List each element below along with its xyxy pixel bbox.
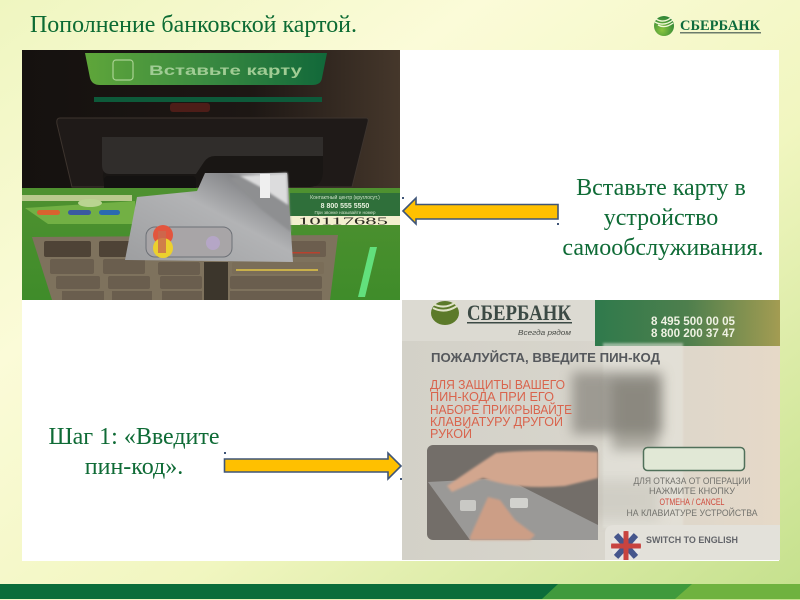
instruction text: step 1: Шаг 1: «Введите (48, 424, 220, 450)
cancel instructions (626, 476, 758, 518)
cancel instructions: НА КЛАВИАТУРЕ УСТРОЙСТВА (626, 507, 758, 518)
instruction text: insert card (562, 175, 764, 261)
red warning: НАБОРЕ ПРИКРЫВАЙТЕ (430, 402, 572, 417)
screen logo: СБЕРБАНК (467, 300, 571, 325)
reflection on the glass (566, 342, 684, 525)
bank card (125, 173, 293, 262)
PIN input box (644, 448, 744, 470)
screen header (402, 300, 780, 346)
phone numbers: 8 495 500 00 05 (651, 316, 736, 328)
screen logo (431, 300, 572, 337)
green sign: insert card (85, 53, 327, 85)
green ATM body: При звонке называйте номер (314, 209, 376, 215)
arrow: pointing right to PIN screen (224, 452, 402, 480)
red warning: ПИН-КОДА ПРИ ЕГО (430, 390, 554, 404)
red warning (430, 378, 572, 441)
instruction text: step 1: пин-код». (85, 454, 183, 480)
card reader bezel (57, 118, 368, 200)
cancel instructions: НАЖМИТЕ КНОПКУ (649, 486, 735, 496)
screen heading: ПОЖАЛУЙСТА, ВВЕДИТЕ ПИН-КОД (431, 350, 661, 365)
title: Пополнение банковской картой. (30, 12, 357, 38)
arrow: pointing left to card photo (402, 197, 559, 225)
logo: Sberbank (654, 16, 761, 36)
switch to English button (605, 525, 780, 561)
instruction text: insert card: устройство (604, 205, 718, 231)
cancel instructions: ДЛЯ ОТКАЗА ОТ ОПЕРАЦИИ (634, 476, 750, 486)
green ATM body: 10117685 (298, 216, 389, 228)
photo: card inserted into ATM (22, 50, 400, 300)
switch to English button: SWITCH TO ENGLISH (646, 535, 738, 545)
red warning: КЛАВИАТУРУ ДРУГОЙ (430, 414, 563, 429)
instruction text: step 1 (48, 424, 220, 480)
instruction text: insert card: самообслуживания. (562, 235, 764, 261)
footer band (0, 584, 800, 599)
instruction text: insert card: Вставьте карту в (576, 175, 746, 201)
green sign: insert card: Вставьте карту (149, 63, 303, 78)
keypad (32, 235, 338, 300)
logo: Sberbank: СБЕРБАНК (680, 18, 760, 34)
screen logo: Всегда рядом (518, 328, 571, 337)
green ATM body: 8 800 555 5550 (321, 203, 369, 210)
red warning: РУКОЙ (430, 426, 472, 441)
cancel instructions: ОТМЕНА / CANCEL (660, 497, 724, 507)
green ATM body: Контактный центр (круглосут.) (310, 194, 380, 201)
phone numbers: 8 800 200 37 47 (651, 328, 735, 340)
red warning: ДЛЯ ЗАЩИТЫ ВАШЕГО (430, 378, 565, 392)
green ATM body (22, 188, 400, 300)
photo: PIN entry screen (402, 300, 780, 561)
phone numbers (651, 316, 735, 337)
hands on keypad picture (427, 445, 598, 540)
